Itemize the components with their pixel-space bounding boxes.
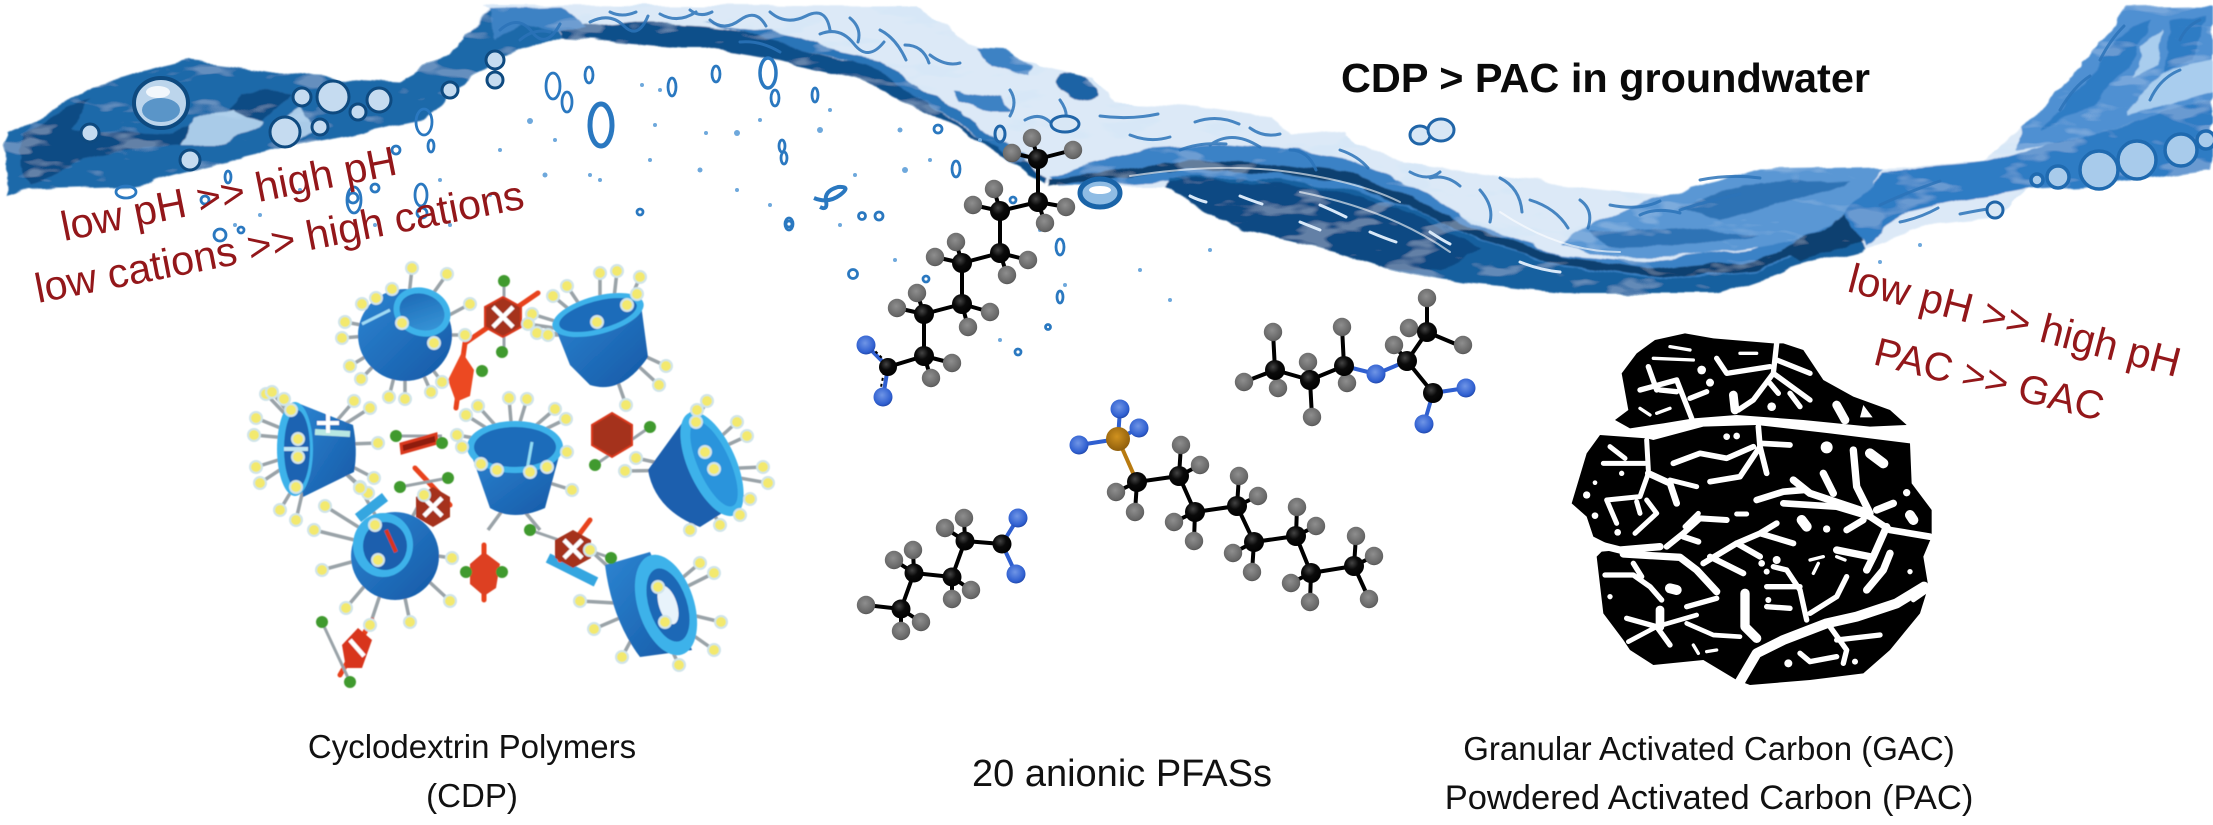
dark contour line bbox=[1048, 166, 1845, 274]
cone D top-right bbox=[548, 284, 648, 387]
caption: Cyclodextrin Polymers (CDP): (CDP) bbox=[426, 777, 518, 814]
caption: Cyclodextrin Polymers (CDP): Cyclodextrin Polymers bbox=[308, 728, 636, 765]
central mid band bbox=[700, 22, 1030, 164]
big dark lens bbox=[1164, 178, 1866, 293]
caption: GAC and PAC: Powdered Activated Carbon (PAC) bbox=[1445, 779, 1973, 817]
PFAS molecule 3: sulfonate chain bbox=[1070, 400, 1383, 611]
cone C center bbox=[467, 421, 563, 515]
cone B left bbox=[277, 402, 356, 497]
green tips bbox=[316, 275, 656, 688]
linker bonds bbox=[340, 293, 590, 675]
water streaks and bubbles bbox=[81, 10, 2213, 355]
squiggle droplet bbox=[814, 187, 846, 208]
second dark band and halo bbox=[1048, 144, 1862, 282]
cone F lower-left bbox=[351, 512, 439, 600]
low cations line: low cations >> high cations bbox=[31, 171, 528, 312]
pore cracks bbox=[1593, 343, 1930, 682]
droplet dots bbox=[233, 83, 1922, 342]
caption: GAC and PAC: Granular Activated Carbon (GAC) bbox=[1463, 730, 1955, 767]
right water band bbox=[1845, 100, 2213, 245]
PFAS molecule 4: short chain bbox=[857, 508, 1028, 640]
PFAS molecule 2: amine chain bbox=[1235, 289, 1476, 434]
right condition text bbox=[1844, 254, 2186, 430]
low pH line right: low pH >> high pH bbox=[1844, 254, 2186, 386]
left water mass bbox=[6, 12, 561, 197]
small pores bbox=[1583, 366, 1913, 667]
yellow tips bbox=[248, 262, 774, 671]
cyclodextrin polymer network bbox=[248, 262, 774, 688]
cone E right bbox=[648, 403, 757, 527]
heading: CDP > PAC in groundwater: CDP > PAC in groundwater bbox=[1341, 55, 1870, 101]
bubbles right band bbox=[2031, 131, 2213, 189]
upper splash blue bbox=[491, 8, 1035, 112]
white x marks bbox=[350, 307, 582, 656]
splash squiggles bbox=[500, 10, 2200, 228]
big bubble center bbox=[1080, 179, 1120, 207]
caption: 20 anionic PFASs: 20 anionic PFASs bbox=[972, 753, 1272, 795]
cone A top-left bbox=[358, 280, 457, 381]
splash bubbles bbox=[995, 116, 2003, 218]
dark oval bbox=[1052, 65, 1102, 107]
dark lens end bbox=[1780, 210, 1862, 264]
big bubble left bbox=[134, 78, 188, 128]
granule top fragment bbox=[1615, 333, 1907, 428]
right rising column bbox=[2018, 6, 2213, 150]
low pH line left: low pH >> high pH bbox=[57, 137, 401, 250]
droplet rings bbox=[116, 58, 1064, 355]
medium bubbles left bbox=[81, 51, 504, 170]
activated carbon granule bbox=[1572, 333, 1932, 685]
cone G lower-right bbox=[605, 547, 709, 663]
stick arms bbox=[254, 268, 768, 665]
water silhouette bbox=[6, 6, 2213, 293]
bright streaks in dark lens bbox=[1190, 196, 1560, 272]
connector bars bbox=[358, 497, 596, 582]
left dark lens bbox=[20, 87, 291, 186]
water wave band bbox=[6, 6, 2213, 293]
benzene linkers bbox=[485, 297, 521, 337]
central dark band bbox=[561, 22, 1044, 186]
mid-blue right basin bbox=[1560, 168, 1883, 258]
left splash lights bbox=[180, 108, 320, 148]
granule main body bbox=[1572, 425, 1932, 685]
PAC over GAC line: PAC >> GAC bbox=[1870, 330, 2108, 430]
PFAS molecule 1: long chain bbox=[856, 129, 1082, 407]
left condition text bbox=[31, 137, 528, 312]
